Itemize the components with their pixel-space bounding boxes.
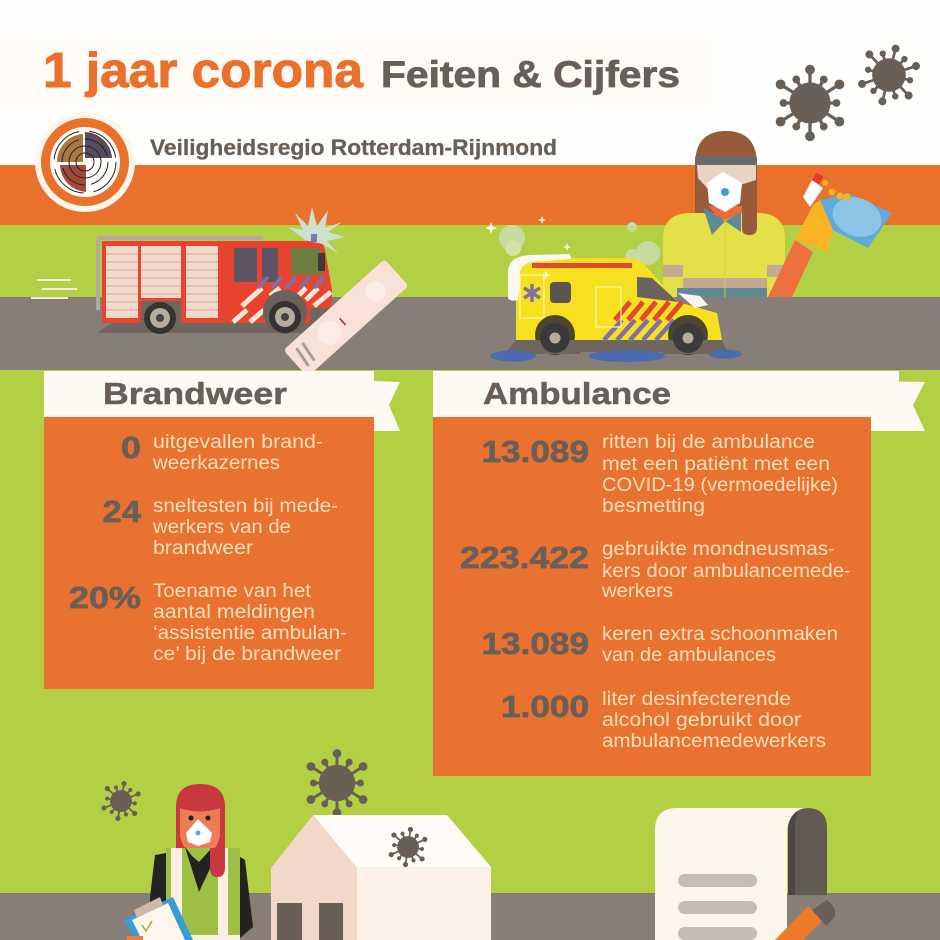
icon: virus top left bbox=[776, 65, 844, 141]
bottom road bbox=[0, 893, 940, 940]
illustration: fire truck bbox=[96, 236, 332, 334]
fact: 13.089 rides bbox=[482, 432, 838, 517]
fact: 20%: aantal meldingen bbox=[153, 602, 315, 623]
panel body bbox=[44, 417, 374, 689]
fact: 0 bbox=[121, 430, 323, 474]
fact: 13.089 rides: 13.089 bbox=[482, 434, 589, 469]
fact: 0: uitgevallen brand- bbox=[153, 432, 323, 453]
ribbon: Ambulance: Ambulance bbox=[483, 376, 671, 411]
fact: 24: sneltesten bij mede- bbox=[153, 496, 338, 517]
fact: 0: weerkazernes bbox=[152, 453, 280, 474]
fact: 13.089 rides: besmetting bbox=[602, 496, 705, 517]
fact: 223.422: werkers bbox=[601, 581, 673, 602]
top road bbox=[0, 297, 940, 370]
icon: rapid test bbox=[283, 259, 409, 377]
panel: Ambulance bbox=[433, 371, 925, 776]
green field bbox=[0, 225, 940, 893]
icon: virus above house bbox=[307, 749, 367, 817]
fact: 1.000: 1.000 bbox=[501, 689, 589, 724]
icon: virus top right bbox=[854, 38, 924, 112]
icon: sparkles bbox=[485, 216, 571, 280]
ribbon: Ambulance bbox=[433, 371, 925, 431]
panel body bbox=[433, 417, 871, 776]
title banner bbox=[0, 38, 712, 106]
fact: 13.089 cleaning bbox=[482, 624, 838, 666]
fact: 24 bbox=[102, 494, 338, 559]
spray bottle bbox=[820, 193, 892, 248]
fact: 1.000 bbox=[501, 689, 826, 752]
fact: 13.089 rides: ritten bij de ambulance bbox=[602, 432, 815, 453]
fact: 1.000: liter desinfecterende bbox=[602, 689, 791, 710]
orange band bbox=[0, 165, 940, 225]
arm bbox=[768, 240, 813, 297]
fact: 20% bbox=[69, 580, 347, 665]
fact: 24: werkers van de bbox=[152, 517, 291, 538]
fact: 13.089 rides: met een patiënt met een bbox=[602, 454, 830, 475]
fact: 223.422: gebruikte mondneusmas- bbox=[602, 539, 835, 560]
fact: 20%: 20% bbox=[69, 580, 141, 615]
illustration: document and pencil bbox=[655, 808, 835, 940]
subtitle: Veiligheidsregio Rotterdam-Rijnmond bbox=[150, 135, 557, 160]
ribbon: Brandweer bbox=[44, 371, 400, 431]
icon: star of life bbox=[524, 284, 540, 302]
illustration: ambulance bbox=[485, 216, 742, 362]
icon: virus on roof bbox=[387, 824, 429, 870]
title: Feiten & Cijfers: Feiten & Cijfers bbox=[381, 54, 680, 95]
fact: 13.089 cleaning: keren extra schoonmaken bbox=[602, 624, 838, 645]
icon: virus bottom left bbox=[100, 778, 142, 824]
fact: 1.000: ambulancemedewerkers bbox=[602, 731, 826, 752]
icon: speed lines bbox=[31, 280, 77, 298]
fact: 13.089 cleaning: van de ambulances bbox=[602, 645, 776, 666]
fact: 0: 0 bbox=[121, 430, 141, 465]
illustration: ambulance worker bbox=[663, 131, 892, 297]
fact: 20%: ce’ bij de brandweer bbox=[153, 644, 342, 665]
fact: 13.089 rides: COVID-19 (vermoedelijke) bbox=[602, 475, 838, 496]
ribbon: Brandweer: Brandweer bbox=[103, 376, 287, 411]
fact: 24: 24 bbox=[102, 494, 142, 529]
fact: 13.089 cleaning: 13.089 bbox=[482, 626, 589, 661]
panel: Brandweer bbox=[44, 371, 400, 689]
fact: 20%: ‘assistentie ambulan- bbox=[153, 623, 347, 644]
icon: siren flash bbox=[288, 207, 345, 253]
title: 1 jaar corona: 1 jaar corona bbox=[43, 44, 364, 98]
fact: 223.422: kers door ambulancemede- bbox=[602, 561, 851, 582]
title bbox=[43, 44, 680, 98]
fact: 223.422 bbox=[460, 539, 851, 602]
fact: 20%: Toename van het bbox=[153, 581, 312, 602]
illustration: house bbox=[271, 815, 491, 940]
icon: logo bbox=[35, 112, 135, 212]
fact: 223.422: 223.422 bbox=[460, 540, 589, 575]
illustration: woman with clipboard bbox=[123, 784, 253, 940]
fact: 1.000: alcohol gebruikt door bbox=[602, 710, 802, 731]
fact: 24: brandweer bbox=[153, 538, 254, 559]
